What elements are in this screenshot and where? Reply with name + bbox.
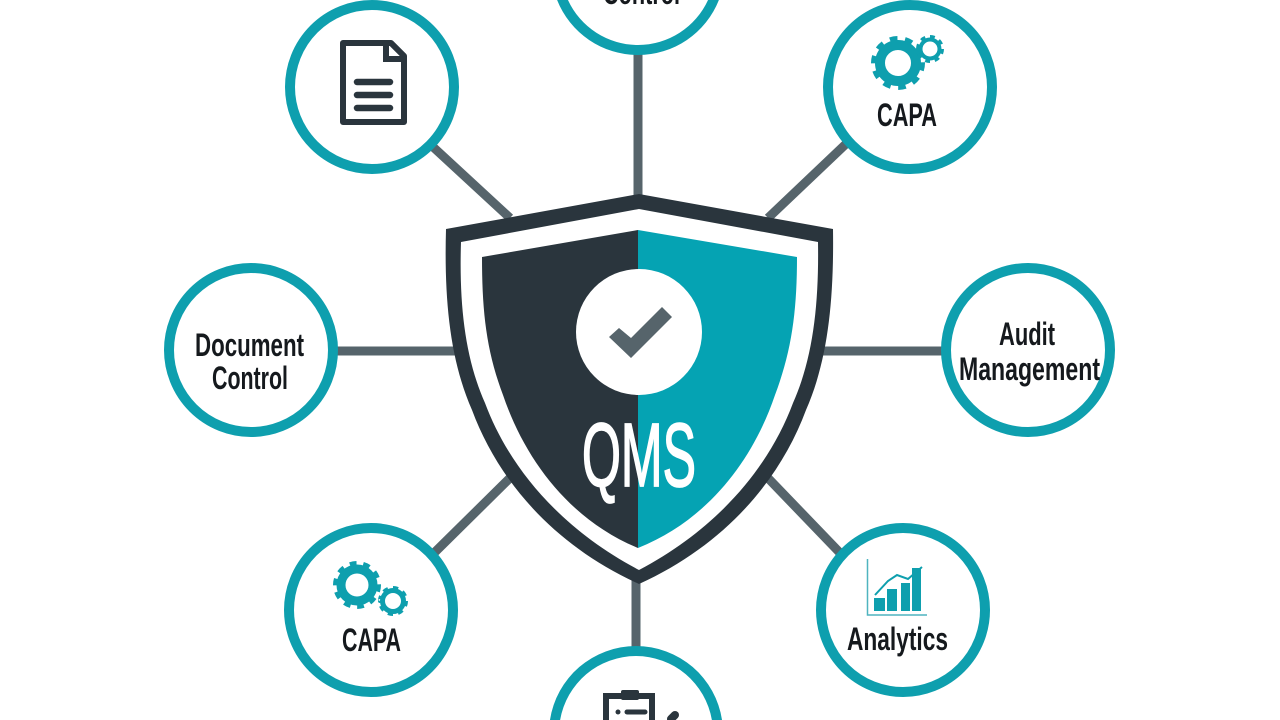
- central shield: [446, 194, 833, 584]
- node: CAPA top right: CAPA: [877, 97, 937, 133]
- node: bottom clipboard: [550, 646, 722, 720]
- shield outer border: [446, 194, 833, 584]
- node: Document Control: Document: [195, 327, 304, 363]
- icon: gears: [336, 564, 406, 614]
- node: document icon: [290, 5, 454, 169]
- node: Analytics: [821, 528, 985, 692]
- check badge: [576, 269, 702, 395]
- icon: clipboard: [606, 690, 675, 720]
- node: top Control: [557, 0, 719, 55]
- node: CAPA bottom left: CAPA: [342, 622, 401, 658]
- icon: bar chart: [868, 559, 927, 615]
- QMS title: QMS: [582, 406, 696, 506]
- node: Audit Management: Audit: [999, 316, 1055, 352]
- icon: document: [343, 43, 404, 122]
- node: Audit Management: Management: [959, 351, 1100, 387]
- node: Document Control: Control: [212, 360, 288, 396]
- icon: gears: [874, 37, 942, 87]
- connector lines: [334, 50, 945, 650]
- node: Analytics: Analytics: [847, 621, 948, 657]
- shield white band: [461, 209, 818, 570]
- node: Audit Management: [946, 268, 1110, 432]
- shield right half: [638, 230, 797, 548]
- node: CAPA top right: [828, 5, 992, 169]
- check mark: [609, 307, 672, 358]
- node: Document Control: [169, 268, 333, 432]
- node: CAPA bottom left: [289, 528, 453, 692]
- shield left half: [482, 230, 638, 548]
